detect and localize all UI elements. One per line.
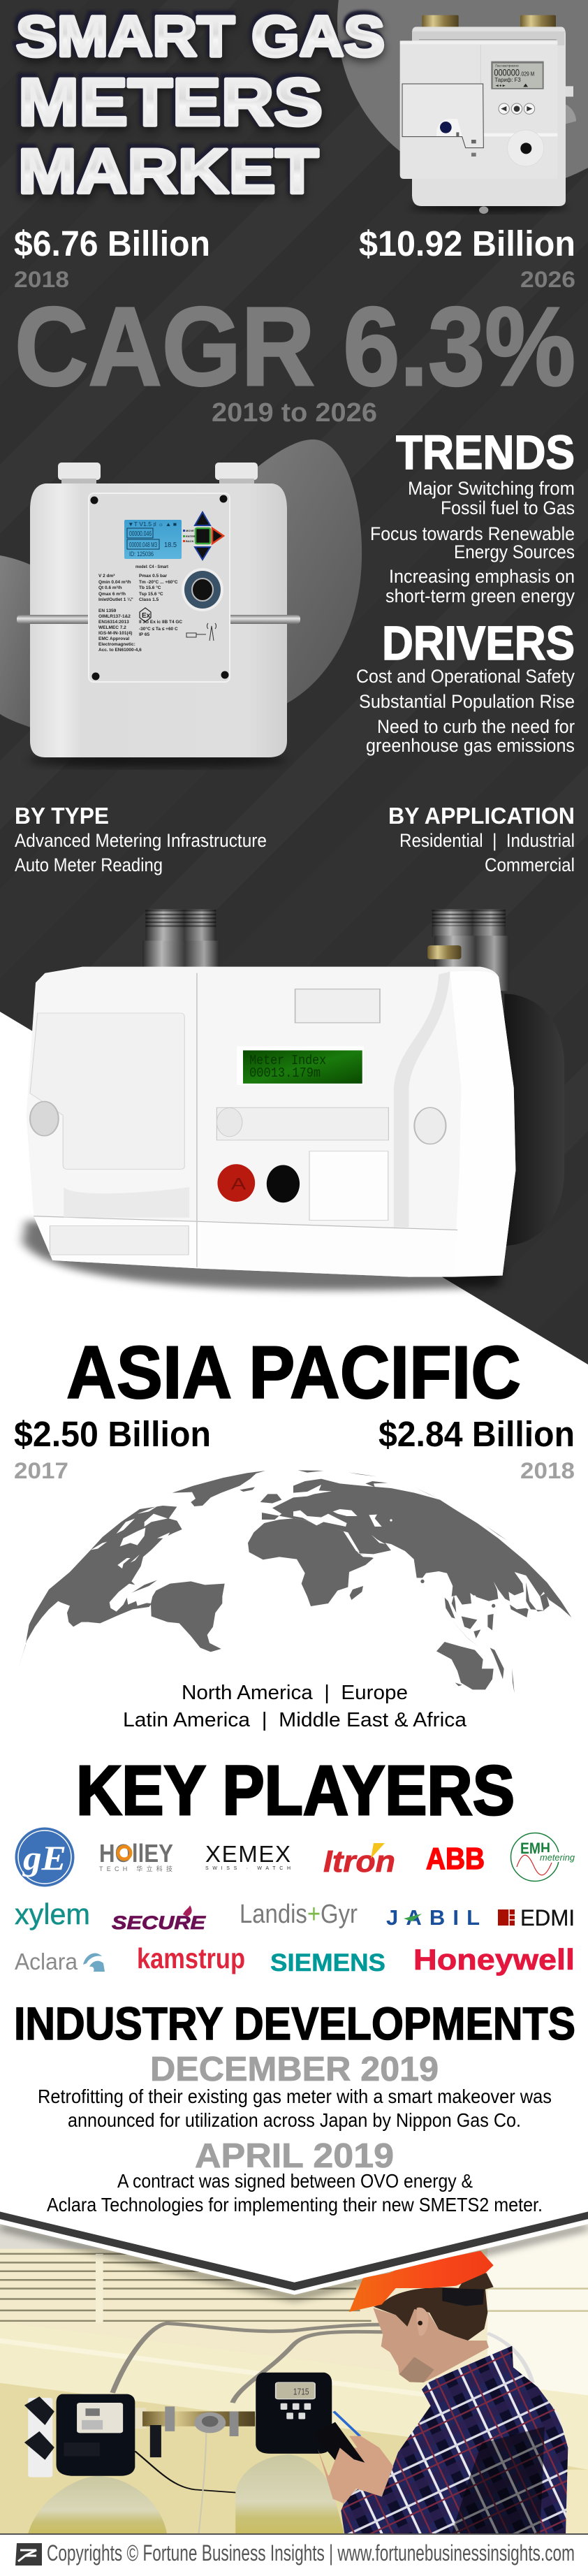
- photo: engineer reading meter with phone: [0, 2212, 588, 2534]
- meter face plate: Ex: [142, 612, 151, 620]
- drivers section: Substantial Population Rise: [359, 691, 575, 712]
- meter face plate: IGS-M-IN-101(4): [98, 631, 132, 636]
- logo: Itron: Itron: [323, 1844, 395, 1879]
- title: Smart Gas Meters Market: [13, 1, 385, 210]
- Asia Pacific value 2017: $2.50 Billion: [14, 1414, 211, 1454]
- meter face plate: Tb 15.6 °C: [139, 585, 161, 590]
- green display: Meter Index: [249, 1053, 326, 1069]
- logo: Xemex: SWISS · WATCH: [205, 1866, 291, 1871]
- trends section: Fossil fuel to Gas: [441, 497, 575, 518]
- market value 2026: [359, 224, 575, 292]
- meter face plate: Pmax 0.5 bar: [139, 574, 168, 578]
- by application segment: [388, 803, 575, 875]
- drivers section: Cost and Operational Safety: [356, 666, 575, 687]
- logo: GE: gE: [22, 1838, 66, 1877]
- meter face plate: Qt 0.6 m³/h: [98, 585, 122, 590]
- development: April 2019: [47, 2137, 543, 2215]
- drivers section: [356, 616, 575, 756]
- drivers section: greenhouse gas emissions: [366, 735, 575, 756]
- meter face plate: Electromagnetic:: [98, 642, 135, 647]
- Asia Pacific value 2017: [14, 1414, 211, 1483]
- other regions list: [123, 1682, 467, 1731]
- chevron divider: [0, 2212, 588, 2290]
- meter face plate: ▼T V1.5 ♯ ☼ ▲ ■: [128, 521, 177, 527]
- development: December 2019: DECEMBER 2019: [150, 2051, 439, 2088]
- meter LCD: [491, 61, 544, 89]
- meter face plate: 18.5: [164, 541, 177, 549]
- Asia Pacific value 2017: 2017: [14, 1458, 68, 1483]
- title: Smart Gas Meters Market: METERS: [18, 66, 323, 143]
- meter face plate: EMC Approval: [98, 636, 129, 641]
- grey blobs behind middle meter: [0, 439, 362, 735]
- Asia Pacific value 2018: $2.84 Billion: [378, 1414, 575, 1454]
- logo: xylem: xylem: [15, 1898, 90, 1930]
- meter LCD: 000000: [494, 67, 520, 78]
- icon: Fortune Business Insights logo: [15, 2543, 42, 2566]
- green display: [237, 1046, 364, 1085]
- logo: Secure: [112, 1905, 206, 1933]
- trends section: Focus towards Renewable: [370, 523, 575, 544]
- development: April 2019: A contract was signed between OVO energy &: [117, 2170, 473, 2192]
- meter LCD: Тариф: F3: [494, 76, 521, 83]
- meter LCD: Газ настроено: [495, 64, 519, 67]
- meter face plate: Qmax 6 m³/h: [98, 592, 126, 597]
- trends section: [370, 425, 575, 606]
- middle smart meter illustration: [17, 463, 300, 767]
- meter face plate: EN16314:2013: [98, 620, 129, 625]
- Key Players heading: KEY PLAYERS: [76, 1752, 515, 1830]
- meter face plate: ID: 125036: [129, 551, 154, 558]
- meter face plate: Inlet/Outlet 1 ¼": [98, 597, 133, 602]
- trends section: short-term green energy: [385, 585, 575, 606]
- Asia Pacific value 2018: [378, 1414, 575, 1483]
- meter face plate: V 2 dm³: [98, 574, 115, 578]
- meter face plate: WELMEC 7.2: [98, 625, 126, 630]
- by type segment: Advanced Metering Infrastructure: [15, 830, 267, 851]
- meter face plate: Tm -20°C ... +60°C: [139, 579, 178, 585]
- title: Smart Gas Meters Market: METERS: [15, 61, 320, 138]
- fittings: [135, 2406, 255, 2457]
- dark diagonal hero panel: [0, 0, 588, 1365]
- development: April 2019: APRIL 2019: [195, 2137, 394, 2175]
- title: Smart Gas Meters Market: MARKET: [18, 137, 318, 207]
- Asia Pacific heading: ASIA PACIFIC: [66, 1330, 521, 1414]
- left controller: [57, 2394, 135, 2476]
- logo: Jabil: JABIL: [386, 1905, 480, 1930]
- meter face plate: Class 1.5: [139, 597, 159, 602]
- title: Smart Gas Meters Market: SMART GAS: [16, 6, 385, 72]
- by type segment: [15, 803, 267, 875]
- market value 2026: $10.92 Billion: [359, 224, 575, 263]
- trends section: Increasing emphasis on: [389, 566, 575, 587]
- logo: Kamstrup: kamstrup: [137, 1942, 245, 1974]
- meter LCD: ◄♦►: [494, 84, 506, 88]
- world map globe: [17, 1470, 571, 1693]
- logo: Siemens: SIEMENS: [270, 1949, 385, 1977]
- logo: Xemex: XEMEX: [205, 1841, 291, 1867]
- logo: GE: [15, 1828, 74, 1886]
- meter face plate: BACK: [186, 539, 194, 543]
- meter face plate: 00000.048 M3: [129, 541, 157, 549]
- meter face plate: OIMLR137-1&2: [98, 614, 131, 619]
- CAGR headline: 2019 to 2026: [212, 398, 377, 428]
- center controller: [256, 2373, 332, 2454]
- logo: Holley: TECH 华立科技: [99, 1865, 173, 1872]
- meter face plate: Tsp 15.6 °C: [139, 591, 163, 597]
- title: Smart Gas Meters Market: SMART GAS: [13, 1, 383, 66]
- meter face plate: IP 65: [139, 632, 149, 637]
- meter face plate: [89, 493, 230, 682]
- logo: Landis+Gyr: Landis+Gyr: [240, 1900, 358, 1929]
- logo: Honeywell: Honeywell: [413, 1943, 575, 1976]
- meter face plate: Qmin 0.04 m³/h: [98, 580, 131, 585]
- other regions list: North America | Europe: [182, 1682, 408, 1704]
- meter face plate: EN 1359: [98, 609, 117, 613]
- red and black terminals: [217, 1164, 300, 1202]
- by type segment: BY TYPE: [15, 803, 109, 829]
- by type segment: Auto Meter Reading: [15, 854, 163, 875]
- logo: Holley: HOllEY: [99, 1839, 173, 1868]
- engineer: [313, 2251, 568, 2534]
- green display: 00013.179m: [249, 1065, 321, 1082]
- development: December 2019: Retrofitting of their existing gas meter with a smart makeover was: [38, 2086, 552, 2107]
- logo: Secure: SECURE: [112, 1912, 206, 1933]
- top smart meter illustration: [400, 15, 576, 214]
- grey circle behind top meter: [337, 0, 588, 189]
- drivers section: Need to curb the need for: [377, 716, 575, 737]
- development: December 2019: announced for utilization across Japan by Nippon Gas Co.: [68, 2109, 521, 2131]
- meter buttons: [499, 103, 535, 114]
- meter LCD: .029 M: [520, 71, 534, 78]
- footer rule: [0, 2533, 588, 2535]
- market value 2026: 2026: [520, 267, 575, 292]
- right tank: [235, 2454, 344, 2533]
- market value 2018: [14, 224, 210, 292]
- title: Smart Gas Meters Market: MARKET: [15, 133, 317, 205]
- red and black terminals: A: [231, 1174, 246, 1193]
- Asia Pacific value 2018: 2018: [520, 1458, 575, 1483]
- market value 2018: $6.76 Billion: [14, 224, 210, 263]
- title: Smart Gas Meters Market: SMART GAS: [16, 5, 385, 68]
- meter face plate: -30°C ≤ Ta ≤ +60 C: [139, 626, 178, 632]
- trends section: Major Switching from: [408, 478, 575, 499]
- logo: EDMI: [498, 1905, 575, 1930]
- meter face plate: ENTER: [186, 534, 196, 538]
- meter face plate: model: C4 - Smart: [135, 565, 169, 569]
- by application segment: BY APPLICATION: [388, 803, 575, 829]
- meter face plate: II 3G Ex ic IIB T4 GC: [139, 620, 182, 625]
- market value 2018: 2018: [14, 267, 69, 292]
- logo: EMH metering: metering: [540, 1852, 575, 1863]
- logo: EDMI: EDMI: [520, 1905, 575, 1930]
- meter face plate: Acc. to EN61000-4,6: [98, 648, 142, 653]
- large white smart meter illustration: [22, 910, 564, 1290]
- by application segment: Commercial: [485, 854, 575, 875]
- left tank: [28, 2476, 167, 2533]
- logo: EMH metering: EMH: [520, 1840, 550, 1857]
- title: Smart Gas Meters Market: METERS: [18, 65, 323, 140]
- meter face plate: 00000.046: [129, 530, 152, 538]
- logo: ABB: ABB: [426, 1842, 485, 1876]
- power strip: [24, 2396, 54, 2477]
- logo: Aclara: Aclara: [15, 1949, 78, 1974]
- logo: EMH metering: [511, 1833, 575, 1881]
- title: Smart Gas Meters Market: MARKET: [18, 139, 318, 210]
- meter face plate: MOVE: [186, 529, 194, 532]
- other regions list: Latin America | Middle East & Africa: [123, 1709, 467, 1731]
- development: April 2019: Aclara Technologies for implementing their new SMETS2 meter.: [47, 2194, 543, 2215]
- trends section: Energy Sources: [454, 541, 575, 562]
- center controller: 1715: [293, 2387, 309, 2397]
- development: December 2019: [38, 2051, 552, 2131]
